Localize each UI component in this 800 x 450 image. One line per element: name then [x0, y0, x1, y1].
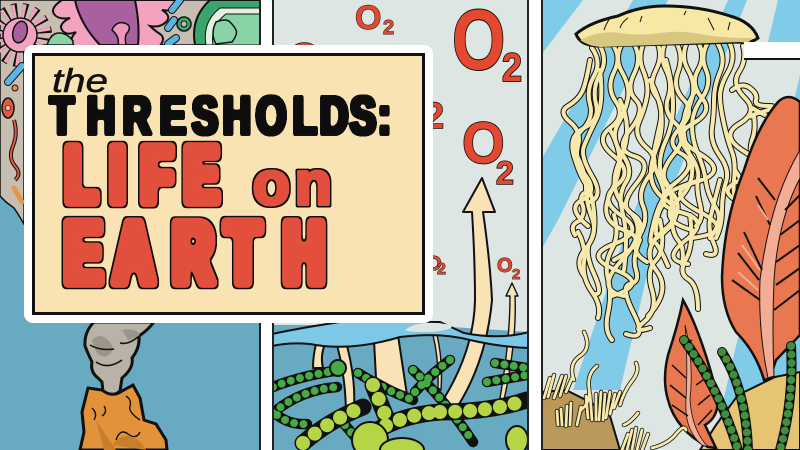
large red leaf: [722, 97, 800, 380]
panel border: [259, 0, 261, 450]
cell: small spiky pink microbe: [0, 15, 40, 55]
oxygen labels: 2: [496, 155, 514, 191]
volcanic vent: [80, 385, 167, 450]
oxygen labels: O: [462, 111, 505, 176]
cell: green cell top right: [194, 0, 261, 45]
oxygen labels: O: [288, 34, 321, 81]
water body: [272, 325, 530, 450]
cell: pink frilled purple blob: [53, 0, 177, 46]
oxygen labels: O: [426, 253, 442, 275]
oxygen labels: 2: [502, 46, 522, 90]
arrow: central rising shaft: [373, 338, 408, 392]
seabed mound left: [541, 390, 620, 450]
orange dot: [12, 85, 18, 91]
smoke plume: [85, 322, 154, 395]
cyanobacteria chains: [273, 360, 527, 445]
panel border: [527, 0, 529, 450]
lime blobs at bottom: [330, 360, 528, 450]
jellyfish bell: [576, 6, 758, 47]
red flagellate cell: [2, 98, 18, 180]
oxygen labels: [288, 0, 522, 283]
title: THRESHOLDS: THRESHOLDS:: [50, 85, 391, 145]
blue rods: [8, 0, 180, 82]
panel: right ocean with jellyfish: [541, 0, 800, 450]
oxygen labels: O: [497, 255, 513, 277]
title: LIFE: LIFE: [66, 131, 218, 220]
oxygen labels: 2: [383, 17, 394, 39]
orange rod: [14, 188, 22, 202]
arrow: big oxygen arrow: [443, 178, 495, 415]
light rays: [541, 0, 800, 440]
oxygen labels: 2: [512, 266, 520, 283]
panel border: [541, 0, 543, 450]
oxygen labels: O: [355, 0, 381, 37]
microbe habitat area: [0, 0, 208, 226]
oxygen labels: 2: [424, 95, 444, 136]
small red leaf: [665, 300, 718, 448]
arrow: left rising shafts: [312, 346, 356, 406]
title: EARTH: EARTH: [65, 203, 324, 302]
panel: middle oxygen and cyanobacteria: [272, 0, 530, 450]
oxygen labels: 2: [437, 261, 446, 278]
anemones: [544, 332, 686, 450]
jellyfish tentacles: [563, 40, 786, 340]
small green cell under blob: [47, 33, 73, 45]
green sprigs: [684, 340, 792, 450]
card frame: [24, 45, 433, 323]
title card: [24, 45, 433, 323]
panel: left microbes and ocean: [0, 0, 261, 450]
water surface band: [272, 322, 529, 348]
arrow: small thin arrows: [433, 283, 518, 400]
sand mound right: [700, 372, 800, 450]
title word: the: the: [52, 62, 108, 99]
white caption bar fragment: [744, 42, 800, 60]
title: on: on: [253, 150, 332, 217]
small green ring cell: [177, 17, 191, 31]
